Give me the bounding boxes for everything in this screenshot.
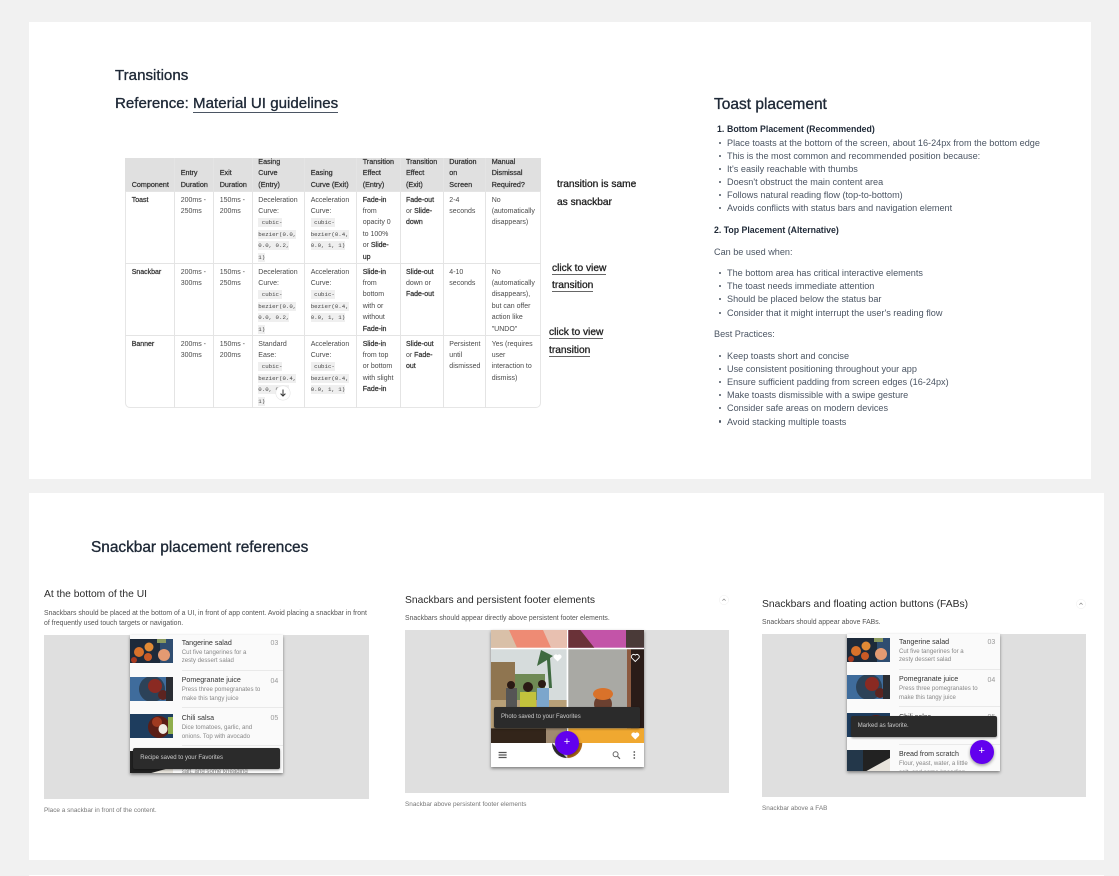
table row: Snackbar: Fade-in	[363, 326, 386, 333]
example description: Snackbars should appear directly above persistent footer elements.	[405, 615, 610, 622]
item text	[182, 649, 246, 664]
snackbar: Recipe saved to your Favorites	[140, 755, 223, 761]
table header row: Effect	[363, 168, 381, 177]
table row: Snackbar: bezier(0.4,	[311, 303, 349, 310]
thumbnail: chili salsa	[847, 713, 890, 737]
item number: 03	[270, 640, 278, 647]
table row: Toast: to 100%	[363, 231, 388, 238]
table row: Snackbar: but can offer	[492, 303, 530, 310]
item text	[899, 685, 978, 701]
table row: Toast: cubic-	[262, 219, 282, 226]
heading: Reference link: Reference: Material UI guidelines	[115, 95, 338, 112]
photo grid with footer bar	[491, 630, 644, 760]
text block: top placement: Can be used when:	[714, 247, 792, 257]
table row: Banner: 1)	[258, 398, 265, 405]
link note: click to view transition (snackbar)	[552, 262, 606, 292]
snackbar: Marked as favorite.	[858, 723, 909, 729]
table header row: (Entry)	[363, 180, 384, 189]
text block: best practices: Best Practices:	[714, 329, 775, 339]
text block: bottom placement: It's easily reachable with thumbs	[727, 164, 858, 174]
table row: Toast: disappears)	[492, 219, 528, 226]
table row: Toast: Fade-out	[406, 197, 434, 204]
floating action button: +	[564, 736, 570, 748]
heading: Transitions: Transitions	[115, 67, 188, 84]
table row: Toast: 250ms	[181, 208, 202, 215]
heading: Snackbar placement references: Snackbar placement references	[91, 539, 308, 556]
caption: Place a snackbar in front of the content.	[44, 806, 157, 814]
item number: 05	[270, 715, 278, 722]
text block: top placement	[714, 225, 942, 318]
thumbnail: tangerine salad	[847, 638, 890, 662]
table row: Toast: 0.0, 0.2,	[258, 242, 289, 249]
example title: Snackbars and floating action buttons (FABs)	[762, 598, 968, 610]
table row: Snackbar: Deceleration	[258, 269, 298, 276]
item text: Dice tomatoes, garlic, and	[182, 724, 252, 731]
item number: 04	[270, 678, 278, 685]
item number: 04	[988, 677, 995, 684]
table header row: Duration	[181, 180, 208, 189]
item title: Tangerine salad	[899, 638, 949, 646]
table row: Banner: from top	[363, 352, 388, 359]
table row: Toast: seconds	[449, 208, 475, 215]
example title: Snackbars and persistent footer elements	[405, 594, 595, 606]
table header row: Component	[132, 180, 169, 189]
item text: make this tangy juice	[182, 695, 239, 702]
table row: Banner: out	[406, 363, 416, 370]
table row: Snackbar: bezier(0.0,	[258, 303, 296, 310]
item title: Chili salsa	[182, 714, 214, 722]
table row: Banner: 0.0, 0.2,	[258, 386, 289, 393]
text block: top placement: Should be placed below the status bar	[727, 294, 881, 304]
collapse button	[1076, 599, 1086, 609]
table header row: Dismissal	[492, 168, 522, 177]
item text: zesty dessert salad	[899, 656, 951, 663]
item text	[182, 686, 260, 702]
item title: Pomegranate juice	[899, 675, 958, 683]
text block: top placement: The bottom area has critical interactive elements	[727, 268, 923, 278]
panel: snackbar placement references	[29, 493, 1104, 860]
text block: best practices: Make toasts dismissible with a swipe gesture	[727, 390, 908, 400]
table row: Toast: Fade-in	[363, 197, 386, 204]
table row: Banner: Ease:	[258, 352, 276, 359]
thumbnail: pomegranate juice	[130, 677, 173, 701]
text block: top placement: 2. Top Placement (Alternative)	[714, 225, 839, 235]
table row: Banner: 200ms	[220, 352, 241, 359]
text block: top placement: Consider that it might interrupt the user's reading flow	[727, 308, 942, 318]
table row: Snackbar: cubic-	[262, 291, 282, 298]
table row: Banner: until	[449, 352, 462, 359]
note: transition is same as snackbar: transition is same	[557, 179, 636, 190]
table header row: Entry	[181, 168, 197, 177]
example description: Snackbars should be placed at the bottom of a UI, in front of app content. Avoid placing a snackbar in front	[44, 610, 367, 617]
table row: Snackbar: bottom	[363, 291, 384, 298]
text block: best practices: Avoid stacking multiple toasts	[727, 416, 846, 426]
item text: Cut five tangerines for a	[182, 649, 246, 656]
table row: Snackbar: Snackbar	[132, 269, 161, 276]
table row: Snackbar: No	[492, 269, 501, 276]
grey stage	[44, 635, 369, 799]
grey stage	[762, 634, 1086, 797]
text block: bottom placement: Follows natural reading flow (top-to-bottom)	[727, 190, 903, 200]
item number: 05	[988, 714, 995, 721]
grey stage	[405, 630, 729, 793]
table row: Toast: Curve:	[311, 208, 331, 215]
table row: Banner: Yes (requires	[492, 341, 533, 348]
item text: zesty dessert salad	[182, 657, 234, 664]
table header row: Required?	[492, 180, 525, 189]
item text: Press three pomegranates to	[899, 685, 978, 692]
table row: Toast: 200ms -	[181, 197, 206, 204]
table row: Banner	[132, 340, 533, 406]
text block: bottom placement: Bottom Placement (Recommended)	[727, 124, 875, 134]
table row: Toast: opacity 0	[363, 219, 391, 226]
item title: Chili salsa	[899, 713, 931, 721]
link note: click to view transition (snackbar): transition	[552, 280, 593, 291]
example description	[44, 610, 367, 627]
table header row: on	[449, 168, 457, 177]
snackbar	[851, 716, 997, 737]
table row: Toast: cubic-	[314, 219, 335, 226]
table row: Snackbar: cubic-	[314, 291, 335, 298]
example title: At the bottom of the UI	[44, 589, 147, 600]
table row: Toast: 1)	[258, 254, 265, 261]
note: transition is same as snackbar	[557, 179, 636, 208]
table row: Banner: Curve:	[311, 352, 331, 359]
table header row: (Entry)	[258, 180, 280, 189]
table row: Snackbar: 0.0, 0.2,	[258, 314, 289, 321]
table row: Snackbar: Slide-out	[406, 269, 434, 276]
text block: best practices	[714, 329, 949, 427]
table row: Snackbar: 200ms -	[181, 269, 206, 276]
table row: Banner: Slide-in	[363, 341, 386, 348]
table row: Banner: or Fade-	[406, 352, 432, 359]
text block: bottom placement: Place toasts at the bottom of the screen, about 16-24px from the bottom edge	[727, 138, 1040, 148]
table row: Banner: dismissed	[449, 363, 480, 370]
table header row: Effect	[406, 168, 424, 177]
item title: Bread from scratch	[899, 750, 959, 758]
table row: Banner: cubic-	[314, 363, 335, 370]
item text: Flour, yeast, water, a little	[899, 760, 968, 767]
item title: Pomegranate juice	[182, 676, 241, 684]
table header row: Exit	[220, 168, 232, 177]
table row: Snackbar: seconds	[449, 280, 475, 287]
table row: Toast: (automatically	[492, 208, 535, 215]
table row: Snackbar: without	[363, 314, 385, 321]
item text: onions. Top with avocado	[182, 733, 250, 740]
table header row: (Exit)	[406, 180, 423, 189]
floating action button	[555, 731, 579, 755]
example description: of frequently used touch targets or navigation.	[44, 620, 183, 627]
table row: Banner: 200ms -	[181, 341, 206, 348]
table row: Snackbar: Curve:	[311, 280, 331, 287]
table row: Toast: 150ms -	[220, 197, 245, 204]
link note: click to view transition (banner)	[549, 327, 604, 357]
table row: Toast: from	[363, 208, 377, 215]
table header row: Curve (Exit)	[311, 180, 349, 189]
text block: best practices: Use consistent positioning throughout your app	[727, 364, 917, 374]
table row: Toast: 0.0, 1, 1)	[311, 242, 345, 249]
phone mockup: recipe list	[130, 635, 283, 773]
table row: Snackbar: from	[363, 280, 377, 287]
thumbnail: pomegranate juice	[847, 675, 890, 699]
table row: Toast: Toast	[132, 197, 148, 204]
table row: Snackbar: Slide-in	[363, 269, 386, 276]
icon: scroll down button	[276, 386, 290, 400]
comparison table	[125, 158, 541, 408]
example: at the bottom of the UI	[44, 589, 369, 814]
table row: Toast: 200ms	[220, 208, 241, 215]
table row: Toast: No	[492, 197, 501, 204]
thumbnail: bread	[130, 751, 173, 773]
example description: Snackbars should appear above FABs.	[762, 619, 881, 626]
table header row: Duration	[220, 180, 247, 189]
thumbnail: tangerine salad	[130, 639, 173, 663]
text block: bottom placement: 1.	[717, 124, 724, 134]
example: persistent footer elements	[405, 594, 729, 808]
link note: click to view transition (banner): transition	[549, 345, 590, 356]
note: transition is same as snackbar: as snackbar	[557, 197, 612, 208]
collapse button	[719, 595, 729, 605]
table row: Snackbar: 250ms	[220, 280, 241, 287]
item text: Cut five tangerines for a	[899, 648, 964, 655]
table row: Snackbar: disappears),	[492, 291, 530, 298]
table row: Banner: with slight	[363, 375, 393, 382]
table row: Toast: Acceleration	[311, 197, 349, 204]
heading: Toast placement: Toast placement	[714, 96, 827, 112]
text block: best practices: Consider safe areas on modern devices	[727, 403, 888, 413]
text block: best practices: Keep toasts short and concise	[727, 351, 849, 361]
table row: Toast: down	[406, 219, 423, 226]
table row: Snackbar: down or	[406, 280, 431, 287]
table row: Banner: 300ms	[181, 352, 202, 359]
link note: click to view transition (snackbar): click to view	[552, 262, 606, 274]
text block: top placement: The toast needs immediate attention	[727, 281, 874, 291]
table row: Toast: or Slide-	[363, 242, 389, 249]
snackbar	[494, 707, 640, 728]
thumbnail: bread	[847, 750, 890, 771]
table row: Snackbar	[132, 268, 535, 334]
item text	[899, 648, 964, 663]
link note: click to view transition (banner): click to view	[549, 327, 603, 338]
snackbar: Photo saved to your Favorites	[501, 714, 581, 720]
table header row: Easing	[311, 168, 333, 177]
floating action button	[970, 740, 994, 764]
text block: best practices: Ensure sufficient padding from screen edges (16-24px)	[727, 377, 949, 387]
table row: Banner: cubic-	[262, 363, 282, 370]
table row: Toast: or Slide-	[406, 208, 432, 215]
text block: bottom placement: This is the most common and recommended position because:	[727, 151, 980, 161]
table header row: Screen	[449, 180, 472, 189]
caption: Snackbar above persistent footer elements	[405, 800, 526, 808]
table row: Snackbar: 4-10	[449, 269, 463, 276]
table header row: Curve	[258, 168, 277, 177]
table row: Banner: dismiss)	[492, 375, 517, 382]
item text: make this tangy juice	[899, 694, 956, 701]
table row: Snackbar: 150ms -	[220, 269, 245, 276]
next panel edge	[29, 875, 1104, 876]
table row: Toast: bezier(0.0,	[258, 231, 296, 238]
table row: Toast: up	[363, 254, 370, 261]
table row: Banner: Slide-out	[406, 341, 434, 348]
table row: Banner: Fade-in	[363, 386, 386, 393]
item title: Tangerine salad	[182, 639, 232, 647]
snackbar	[133, 748, 280, 769]
item text: Press three pomegranates to	[182, 686, 260, 693]
table row: Banner: Persistent	[449, 341, 480, 348]
table row: Snackbar: "UNDO"	[492, 326, 517, 333]
table row: Snackbar: Curve:	[258, 280, 279, 287]
phone mockup: recipe list with FAB	[847, 634, 1000, 771]
table row: Toast: Deceleration	[258, 197, 298, 204]
table row: Snackbar: 300ms	[181, 280, 202, 287]
table row: Snackbar: 0.0, 1, 1)	[311, 314, 345, 321]
table row: Toast	[132, 196, 535, 262]
phone mockup: photo grid	[491, 630, 644, 767]
table row: Banner: or bottom	[363, 363, 392, 370]
text block: bottom placement	[717, 124, 1040, 213]
floating action button: +	[978, 745, 985, 757]
table row: Snackbar: with or	[363, 303, 383, 310]
table row: Banner: 0.0, 1, 1)	[311, 386, 345, 393]
table row: Banner: user	[492, 352, 505, 359]
panel: transitions and toast placement	[29, 22, 1091, 479]
table row: Snackbar: action like	[492, 314, 523, 321]
item number: 03	[988, 639, 995, 646]
table row: Toast: bezier(0.4,	[311, 231, 349, 238]
table row: Banner: Acceleration	[311, 341, 349, 348]
table row: Banner: Standard	[258, 341, 287, 348]
table row: Snackbar: (automatically	[492, 280, 535, 287]
table row: Snackbar: 1)	[258, 326, 265, 333]
table row: Banner: 150ms -	[220, 341, 245, 348]
table row: Snackbar: Acceleration	[311, 269, 349, 276]
item text	[899, 760, 968, 771]
table row: Banner: bezier(0.4,	[311, 375, 349, 382]
thumbnail: chili salsa	[130, 714, 173, 738]
caption: Snackbar above a FAB	[762, 804, 827, 812]
table row: Toast: Curve:	[258, 208, 279, 215]
table row: Toast: 2-4	[449, 197, 459, 204]
table header row	[125, 158, 541, 191]
text block: bottom placement: Avoids conflicts with status bars and navigation element	[727, 203, 952, 213]
item text	[182, 724, 252, 740]
example: floating action buttons	[762, 598, 1086, 812]
table row: Banner: Banner	[132, 341, 154, 348]
table row: Banner: bezier(0.4,	[258, 375, 296, 382]
table row: Banner: interaction to	[492, 363, 532, 370]
table row: Snackbar: Fade-out	[406, 291, 434, 298]
text block: bottom placement: Doesn't obstruct the main content area	[727, 177, 883, 187]
